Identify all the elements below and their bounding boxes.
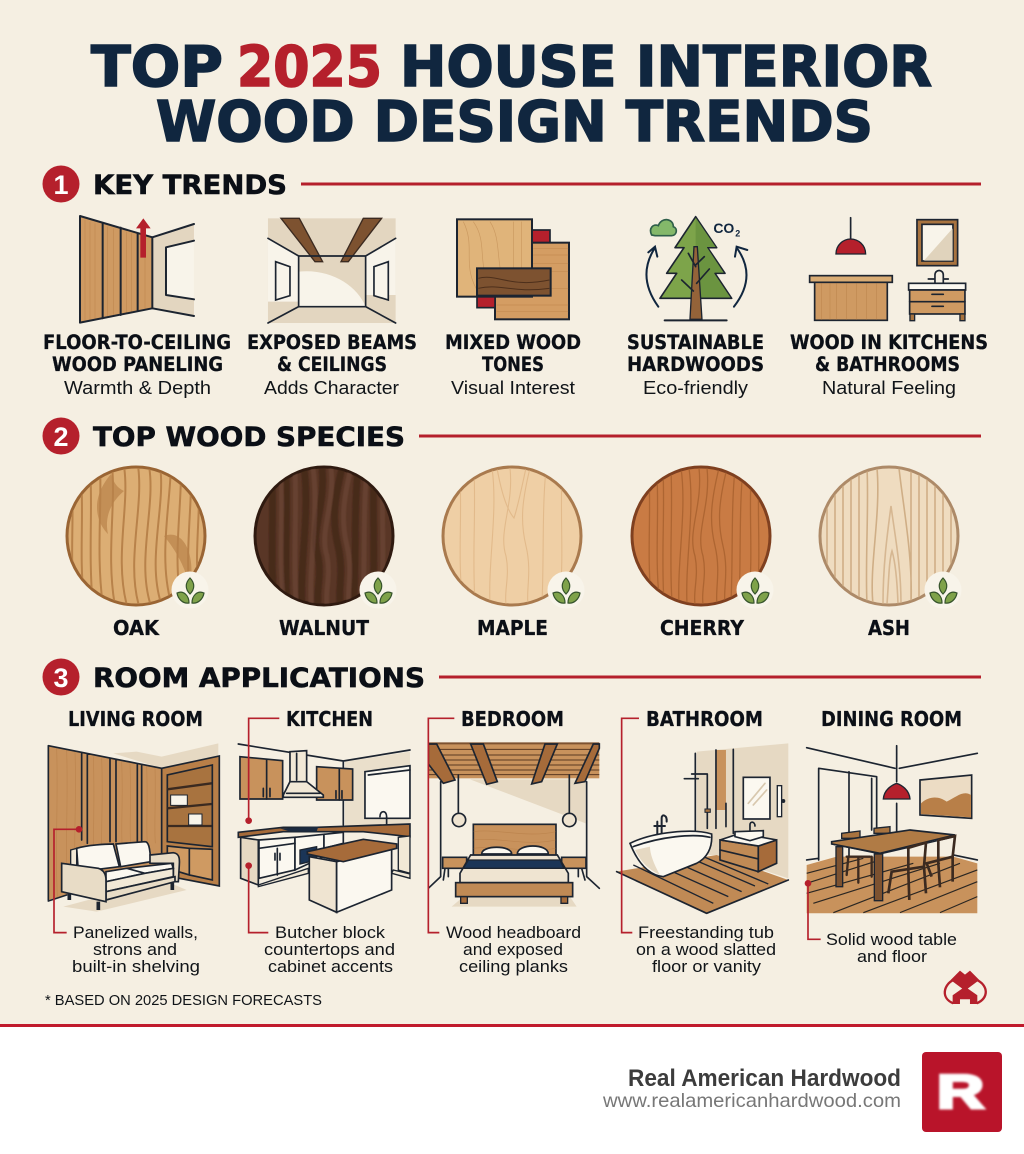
room: bedroom: and exposed xyxy=(463,940,563,959)
room: kitchen: countertops and xyxy=(264,940,395,959)
trend: wood in kitchens and bathrooms: WOOD IN KITCHENS xyxy=(790,331,988,354)
room: kitchen xyxy=(238,707,410,976)
room: bathroom xyxy=(617,707,788,976)
trend: sustainable hardwoods: 2 xyxy=(735,228,740,238)
trend: sustainable hardwoods: SUSTAINABLE xyxy=(627,331,764,354)
wood sample: oak: OAK xyxy=(113,616,160,640)
wood sample: cherry: CHERRY xyxy=(660,616,744,640)
trend: floor-to-ceiling wood paneling: WOOD PANELING xyxy=(52,353,223,376)
trend: sustainable hardwoods: CO xyxy=(713,220,734,236)
room: living room: LIVING ROOM xyxy=(68,707,203,731)
trend: sustainable hardwoods: HARDWOODS xyxy=(627,353,764,376)
trend: exposed beams and ceilings: & CEILINGS xyxy=(277,353,387,376)
room: bedroom: ceiling planks xyxy=(459,957,568,976)
trend: exposed beams and ceilings: Adds Character xyxy=(264,377,399,398)
title: 2025 xyxy=(237,35,382,100)
room: bathroom: floor or vanity xyxy=(652,957,762,976)
title xyxy=(91,35,932,155)
section heading: top wood species xyxy=(42,418,981,454)
trend: wood in kitchens and bathrooms xyxy=(790,218,988,398)
wood sample: cherry xyxy=(632,467,774,640)
room: bathroom: BATHROOM xyxy=(646,707,763,731)
icon: small house heart logo xyxy=(945,971,986,1004)
title: WOOD DESIGN TRENDS xyxy=(156,90,873,155)
room: bathroom: on a wood slatted xyxy=(636,940,776,959)
footer brand name: Real American Hardwood xyxy=(628,1065,901,1092)
room: dining room: Solid wood table xyxy=(826,930,957,949)
section heading: room applications: 3 xyxy=(53,663,69,693)
room: kitchen: Butcher block xyxy=(275,923,386,942)
trend: wood in kitchens and bathrooms: & BATHROOMS xyxy=(815,353,960,376)
footnote: * BASED ON 2025 DESIGN FORECASTS xyxy=(45,993,322,1009)
trend: mixed wood tones: MIXED WOOD xyxy=(445,331,581,354)
section heading: room applications xyxy=(42,658,981,696)
footer xyxy=(0,1024,1024,1154)
wood sample: maple xyxy=(443,467,584,640)
wood sample: maple: MAPLE xyxy=(477,616,548,640)
section heading: room applications: ROOM APPLICATIONS xyxy=(93,663,425,694)
section heading: key trends xyxy=(42,166,981,202)
panel: room applications xyxy=(42,658,981,976)
trend: floor-to-ceiling wood paneling xyxy=(43,216,231,398)
trend: sustainable hardwoods xyxy=(627,217,764,398)
trend: floor-to-ceiling wood paneling: Warmth & Depth xyxy=(64,377,211,398)
room: living room: strons and xyxy=(93,940,177,959)
footer website: www.realamericanhardwood.com xyxy=(602,1090,901,1112)
section heading: top wood species: TOP WOOD SPECIES xyxy=(93,422,405,453)
trend: mixed wood tones xyxy=(445,219,581,398)
wood sample: ash: ASH xyxy=(868,616,910,640)
room: living room: Panelized walls, xyxy=(73,923,198,942)
wood sample: oak xyxy=(67,466,208,640)
trend: wood in kitchens and bathrooms: Natural Feeling xyxy=(822,377,956,398)
room: living room xyxy=(48,707,219,976)
title: TOP xyxy=(91,35,223,100)
trend: exposed beams and ceilings: EXPOSED BEAMS xyxy=(247,331,417,354)
section heading: key trends: KEY TRENDS xyxy=(93,170,287,201)
wood sample: walnut: WALNUT xyxy=(279,616,369,640)
section heading: key trends: 1 xyxy=(53,170,69,200)
wood sample: walnut xyxy=(255,467,396,640)
logo: red R badge: R xyxy=(937,1065,984,1118)
trend: mixed wood tones: Visual Interest xyxy=(451,377,575,398)
wood sample: ash xyxy=(820,467,962,640)
trend: exposed beams and ceilings xyxy=(247,218,417,398)
room: dining room: and floor xyxy=(857,947,927,966)
logo: red R badge xyxy=(922,1052,1002,1132)
room: kitchen: cabinet accents xyxy=(268,957,393,976)
room: kitchen: KITCHEN xyxy=(286,707,373,731)
section heading: top wood species: 2 xyxy=(53,422,69,452)
trend: sustainable hardwoods: Eco-friendly xyxy=(643,377,749,398)
panel: top wood species xyxy=(42,418,981,640)
room: dining room xyxy=(805,707,977,966)
trend: floor-to-ceiling wood paneling: FLOOR-TO-CEILING xyxy=(43,331,231,354)
room: dining room: DINING ROOM xyxy=(821,707,962,731)
room: living room: built-in shelving xyxy=(72,957,200,976)
trend: mixed wood tones: TONES xyxy=(482,353,544,376)
room: bedroom xyxy=(428,707,599,976)
room: bedroom: Wood headboard xyxy=(446,923,581,942)
panel: key trends xyxy=(42,166,988,398)
room: bedroom: BEDROOM xyxy=(461,707,564,731)
title: HOUSE INTERIOR xyxy=(400,35,932,100)
room: bathroom: Freestanding tub xyxy=(638,923,774,942)
